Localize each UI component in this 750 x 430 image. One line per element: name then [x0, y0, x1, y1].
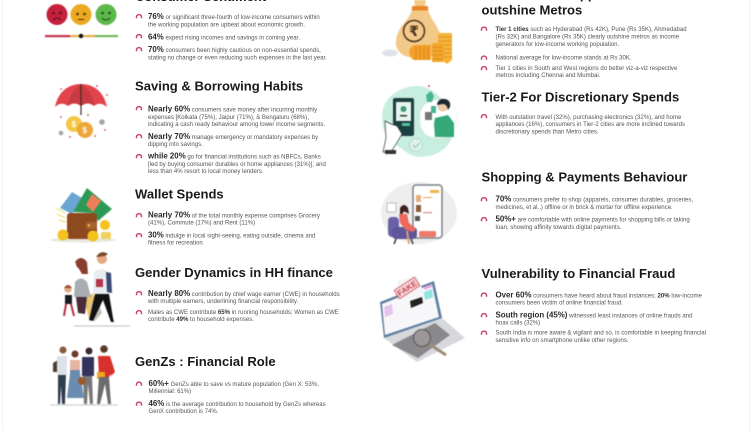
icon: money bag with coins	[382, 0, 452, 64]
bullet list: tier-1 cities: generators for low-income working population.	[496, 42, 620, 48]
heading: saving and borrowing habits: Saving & Borrowing Habits	[135, 78, 303, 94]
heading: vulnerability to financial fraud: Vulnerability to Financial Fraud	[482, 266, 675, 281]
bullet list: genz financial role: GenX contribution is 74%.	[148, 409, 219, 415]
icon: group of young people	[50, 345, 118, 405]
bullet list: saving and borrowing habits: [led by buying consumer durables or home appliances (31%)]; and	[148, 162, 326, 168]
heading: gender dynamics: Gender Dynamics in HH finance	[135, 265, 333, 280]
panel: consumer sentiment	[45, 0, 327, 62]
bullet list: wallet spends: fitness for recreation	[148, 240, 203, 246]
bullet list: tier-1 cities: National average for low-income stands at Rs 30K.	[496, 56, 632, 62]
bullet list: tier-1 cities: Tier 1 cities such as Hyderabad (Rs 42K), Pune (Rs 35K), Ahmedabad	[496, 27, 687, 33]
bullet list: saving and borrowing habits: dipping into savings.	[148, 142, 203, 148]
bullet list: gender dynamics	[136, 289, 340, 323]
bullet list: shopping: medicines, et al..) offline or in brick & mortar for offline experience.	[496, 205, 673, 211]
bullet list: genz financial role	[136, 379, 326, 415]
panel: genz financial role	[50, 345, 326, 415]
bullet list: saving and borrowing habits	[136, 104, 326, 175]
bullet list: tier-2: With outstation travel (32%), purchasing electronics (32%), and home	[496, 115, 682, 121]
bullet list: tier-1 cities: Tier 1 cities in South and West regions do better viz-a-viz respective	[496, 66, 678, 72]
bullet list: genz financial role: 60%+ GenZs able to save vs mature population (Gen X: 53%,	[148, 379, 319, 388]
bullet list: vulnerability: Over 60% consumers have heard about fraud instances; 20% low-income	[496, 290, 703, 300]
icon: woman on chair shopping by phone	[381, 182, 457, 244]
bullet list: consumer sentiment: the working population are upbeat about economic growth.	[148, 22, 305, 28]
bullet list: gender dynamics: Males as CWE contribute 65% in running households; Women as CWE	[148, 310, 339, 316]
bullet list: consumer sentiment	[136, 12, 327, 62]
icon: laptop with fake stamp and magnifier: FAKE	[396, 278, 419, 298]
bullet list: tier-1 cities: metros including Chennai and Mumbai.	[496, 73, 601, 79]
icon: mood faces and scale	[45, 4, 118, 38]
icon: laptop with fake stamp and magnifier	[380, 275, 465, 362]
icon: family walking	[64, 252, 130, 326]
icon: umbrella and coins: $	[72, 120, 76, 129]
bullet list: saving and borrowing habits: while 20% go for financial institutions such as NBFCs, Banks	[147, 152, 321, 160]
bullet list: consumer sentiment: 76% or significant three-fourth of low-income consumers within	[148, 12, 320, 21]
bullet list: genz financial role: 46% is the average contribution to household by GenZs whereas	[148, 399, 326, 408]
bullet list: tier-1 cities: (Rs 32K) and Bangalore (Rs 35K) clearly outshine metros as income	[496, 34, 680, 40]
bullet list: tier-2: appliances (16%), consumers in Tier-2 cities are more inclined towards	[496, 122, 685, 128]
bullet list: wallet spends: Nearly 70% of the total monthly expense comprises Grocery	[148, 210, 321, 220]
bullet list: shopping	[482, 194, 693, 231]
heading: tier-2 for discretionary spends: Tier-2 For Discretionary Spends	[482, 90, 679, 104]
bullet list: vulnerability: South India is more aware & vigilant and so, is comfortable in keeping financial	[496, 330, 706, 336]
bullet list: tier-2	[482, 115, 685, 136]
icon: phone payment illustration	[382, 85, 457, 157]
bullet list: vulnerability: consumers been victim of online financial fraud.	[496, 300, 623, 306]
bullet list: gender dynamics: Nearly 80% contribution by chief wage earner (CWE) in households	[148, 289, 340, 298]
panel: gender dynamics	[64, 252, 340, 326]
bullet list: gender dynamics: contribute 49% to household expenses.	[148, 317, 254, 323]
bullet list: saving and borrowing habits: less than 4% resort to local money lenders.	[148, 169, 264, 175]
bullet list: wallet spends: 30% indulge in local sight-seeing, eating outside, cinema and	[148, 230, 315, 240]
bullet list: gender dynamics: with multiple earners, underlining financial responsibility.	[147, 299, 298, 305]
panel: wallet spends	[50, 186, 321, 246]
heading: shopping and payments behaviour: Shopping & Payments Behaviour	[482, 170, 687, 184]
panel: tier-2 discretionary spends	[382, 85, 685, 157]
bullet list: genz financial role: Millennial: 61%)	[148, 389, 191, 395]
icon: umbrella and coins: $	[82, 126, 88, 135]
icon: wallet with cash and coins	[50, 188, 116, 242]
bullet list: vulnerability: South region (45%) witnessed least instances of online frauds and	[496, 310, 692, 320]
panel: tier-1 cities	[382, 0, 687, 79]
bullet list: wallet spends	[136, 210, 321, 246]
panel: vulnerability to financial fraud	[380, 266, 706, 362]
bullet list: vulnerability: hoax calls (32%)	[496, 320, 540, 326]
bullet list: shopping: 70% consumers prefer to shop (apparels, consumer durables, groceries,	[496, 194, 693, 204]
panel: shopping and payments behaviour	[381, 170, 693, 244]
icon: umbrella and coins	[55, 84, 108, 138]
panel: saving and borrowing habits	[55, 78, 326, 175]
icon: money bag with coins: ₹	[409, 24, 419, 40]
bullet list: tier-2: discretionary spends than Metro cities.	[496, 130, 599, 136]
heading: genz financial role: GenZs : Financial Role	[135, 354, 276, 369]
bullet list: vulnerability	[482, 290, 706, 344]
bullet list: shopping: 50%+ are comfortable with online payments for shopping bills or taking	[496, 214, 690, 224]
bullet list: saving and borrowing habits: Nearly 60% consumers save money after incurring monthly	[148, 104, 318, 114]
heading second line: outshine Metros	[482, 2, 582, 18]
bullet list: consumer sentiment: stating no change or even reducing such expenses in the last year.	[148, 56, 327, 62]
bullet list: shopping: loan, showing affinity towards digital payments.	[496, 225, 622, 231]
bullet list: consumer sentiment: 64% expect rising incomes and savings in coming year.	[148, 32, 300, 42]
bullet list: tier-1 cities	[482, 27, 687, 79]
bullet list: consumer sentiment: 70% consumers been highly cautious on non-essential spends,	[148, 45, 321, 54]
bullet list: wallet spends: (41%), Commute (17%) and Rent (11%)	[148, 220, 255, 226]
bullet list: saving and borrowing habits: expenses [Kolkata (75%), Jaipur (71%), & Bengaluru (68%),	[148, 115, 309, 121]
bullet list: vulnerability: sensitive info on smartphone unlike other regions.	[496, 338, 629, 344]
bullet list: saving and borrowing habits: Nearly 70% manage emergency or mandatory expenses by	[148, 132, 319, 141]
heading: wallet spends: Wallet Spends	[135, 186, 224, 202]
bullet list: saving and borrowing habits: indicating a cash ready behaviour among lower income segments.	[148, 122, 325, 128]
